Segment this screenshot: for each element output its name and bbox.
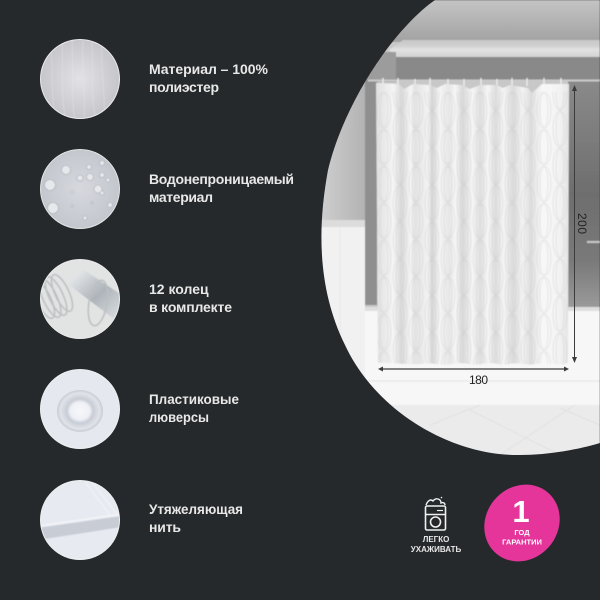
feature: fabric: [40, 39, 269, 120]
swatch: fabric: [40, 39, 120, 120]
dimension: height 200: 200: [575, 213, 589, 234]
cornice: [389, 40, 600, 57]
left white tiles: [322, 220, 366, 378]
swatch: grommet: [40, 369, 120, 449]
icon: washing machine: [426, 497, 446, 530]
alcove column: [365, 80, 377, 305]
feature: rings: [29, 259, 232, 339]
text: weight thread: Утяжеляющая: [149, 501, 243, 517]
swatch: rings on rod: [40, 259, 120, 339]
swatch: thread: [38, 480, 122, 560]
curtain rod: [368, 80, 600, 82]
dimension: width 180: [378, 366, 569, 387]
text: material: Материал – 100%: [149, 61, 269, 77]
feature: grommets: [40, 369, 239, 449]
text: waterproof: Водонепроницаемый: [149, 171, 294, 187]
curtain rings: [383, 78, 561, 86]
badge: easy care: [411, 497, 461, 554]
left side wall: [344, 82, 366, 220]
text: rings: 12 колец: [149, 281, 209, 297]
ceiling: [392, 6, 600, 42]
dimension: height 200: [572, 85, 589, 363]
feature: weight thread: [38, 480, 243, 560]
right wall: [568, 81, 600, 307]
swatch: water drops: [40, 149, 120, 229]
text: grommets: Пластиковые: [149, 391, 239, 407]
towel rail: [587, 241, 600, 243]
text: material: полиэстер: [149, 79, 219, 95]
pink blob: [469, 469, 575, 577]
text: rings: в комплекте: [149, 299, 232, 315]
bathtub front: [365, 307, 600, 405]
feature: waterproof: [40, 149, 294, 229]
badge: 1 year warranty: [469, 469, 575, 577]
text: easy care: ЛЕГКО: [423, 535, 449, 544]
dimension: width 180: 180: [469, 373, 488, 387]
number 1: 1: [512, 494, 530, 529]
floor: [390, 404, 600, 455]
text: waterproof: материал: [149, 189, 213, 205]
text: grommets: люверсы: [149, 409, 209, 425]
photo: bathroom with curtain: [310, 0, 600, 460]
text: easy care: УХАЖИВАТЬ: [411, 545, 461, 554]
text: year warranty: ГОД: [514, 528, 530, 537]
text: year warranty: ГАРАНТИИ: [502, 538, 542, 546]
text: weight thread: нить: [149, 519, 181, 535]
curtain: [376, 83, 569, 365]
upper wall: [360, 52, 600, 82]
